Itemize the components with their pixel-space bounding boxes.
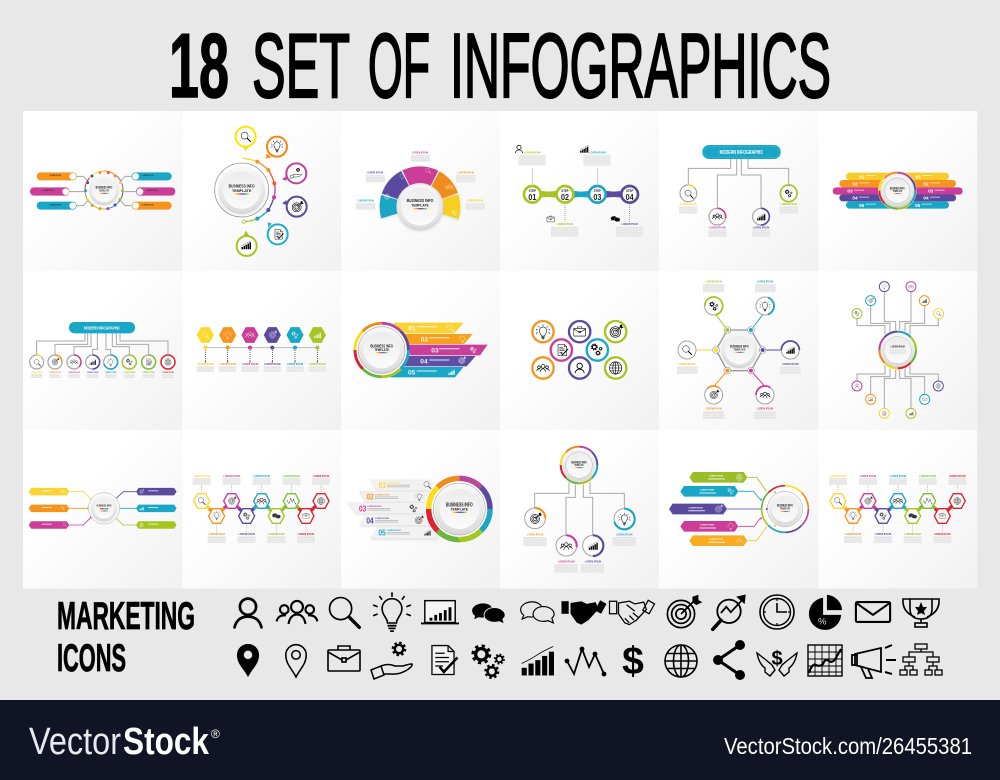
panel 18: hexagon chain repeat bbox=[829, 476, 966, 543]
panel 11: hexagon hub with six nodes: LOREM IPSUM bbox=[679, 364, 695, 366]
panel 6: central disc with five stacked double bars: 05 bbox=[915, 203, 921, 208]
panel 1: central ring with six pill bars: BUSINESS INFO bbox=[96, 186, 112, 190]
panel 17: disc with five hexagonal bars on the left bbox=[669, 472, 809, 546]
panel 7: modern infographic with eight nodes bbox=[30, 322, 175, 378]
panel 4: four step chain: LOREM IPSUM bbox=[621, 224, 638, 226]
panel 7: modern infographic with eight nodes: LOREM IPSUM bbox=[123, 372, 136, 374]
row 3 left panels bbox=[29, 475, 493, 543]
panel 7: modern infographic with eight nodes: LOREM IPSUM bbox=[49, 372, 61, 374]
panel 4: four step chain: 02 bbox=[561, 193, 569, 202]
panel 11: hexagon hub with six nodes bbox=[677, 282, 801, 419]
panel 4: four step chain: STEP bbox=[561, 189, 569, 193]
panel 6: central disc with five stacked double bars: 04 bbox=[923, 196, 929, 201]
panel 15: ring with five numbered grey tabs: 05 bbox=[378, 527, 386, 537]
panel 7: modern infographic with eight nodes: LOREM IPSUM bbox=[68, 372, 80, 374]
panel 15: ring with five numbered grey tabs: LOREM IPSUM bbox=[387, 530, 401, 532]
panel 4: four step chain: 03 bbox=[593, 193, 602, 202]
panel 15: ring with five numbered grey tabs: LOREM IPSUM bbox=[367, 506, 382, 508]
panel 11: hexagon hub with six nodes: LOREM IPSUM bbox=[705, 409, 722, 411]
brand logo: ® bbox=[211, 727, 220, 741]
image reference: VectorStock.com/26455381 bbox=[724, 733, 972, 759]
panel 6: central disc with five stacked double bars bbox=[833, 171, 963, 210]
brand logo: Stock bbox=[123, 721, 210, 763]
panel 15: ring with five numbered grey tabs: 04 bbox=[366, 515, 374, 525]
panel 15: ring with five numbered grey tabs: LOREM IPSUM bbox=[375, 494, 389, 496]
panel 6: central disc with five stacked double bars: 02 bbox=[852, 181, 858, 186]
panel 9: disc with five slanted colored bars bbox=[354, 322, 488, 378]
panel 17: disc with five hexagonal bars on the left: TEMPLATE bbox=[780, 508, 790, 511]
panel 5: modern infographic org diagram: LOREM IPSUM bbox=[680, 204, 697, 206]
panel 13: disc with six hexagonal bars bbox=[29, 488, 177, 529]
panel 15: ring with five numbered grey tabs: LOREM IPSUM bbox=[375, 518, 389, 520]
panel 16: top ring with four branch nodes: LOREM IPSUM bbox=[616, 534, 633, 536]
panel 15: ring with five numbered grey tabs: 02 bbox=[366, 492, 374, 502]
title: SET bbox=[252, 16, 350, 117]
panel 6: central disc with five stacked double bars: 03 bbox=[847, 189, 853, 194]
panel 16: top ring with four branch nodes: LOREM IPSUM bbox=[558, 561, 575, 563]
panel 5: modern infographic org diagram: LOREM IPSUM bbox=[753, 227, 769, 229]
panel 16: top ring with four branch nodes: BUSINESS INFO bbox=[571, 460, 587, 464]
panel 7: modern infographic with eight nodes: MODERN INFOGRAPHIC bbox=[84, 325, 120, 330]
panel 3: half donut: LOREM IPSUM bbox=[467, 201, 483, 203]
panel 6: central disc with five stacked double bars: 03 bbox=[928, 189, 934, 194]
panel 16: top ring with four branch nodes bbox=[523, 445, 636, 573]
panel 4: four step chain: 01 bbox=[528, 193, 537, 202]
panel 14: hexagon chain bbox=[193, 476, 330, 543]
title bbox=[169, 16, 831, 117]
row 1 right panels bbox=[515, 145, 963, 237]
panel 3: half donut: LOREM IPSUM bbox=[367, 173, 383, 175]
panel 12: central ring with twelve circuit nodes bbox=[852, 282, 944, 418]
panel 17: disc with five hexagonal bars on the left: LOREM IPSUM bbox=[709, 476, 723, 478]
panel 15: ring with five numbered grey tabs: BUSINESS INFO bbox=[446, 502, 473, 508]
row 2 right panels bbox=[532, 282, 944, 419]
panel 3: half donut: LOREM IPSUM bbox=[412, 153, 428, 155]
panel 4: four step chain: STEP bbox=[529, 189, 537, 193]
title: 18 bbox=[169, 16, 229, 117]
panel 1: central ring with six pill bars: TEMPLATE bbox=[99, 189, 109, 193]
marketing icons heading: MARKETING bbox=[57, 595, 195, 638]
panel 15: ring with five numbered grey tabs: TEMPLATE bbox=[451, 507, 468, 511]
panel 5: modern infographic org diagram: MODERN INFOGRAPHIC bbox=[720, 150, 763, 156]
footer bar bbox=[0, 700, 1000, 780]
panel 6: central disc with five stacked double bars: TEMPLATE bbox=[893, 190, 902, 193]
panel 1: central ring with six pill bars: LOREM IPSUM bbox=[42, 190, 55, 192]
panel 9: disc with five slanted colored bars: 05 bbox=[408, 370, 416, 377]
panel 6: central disc with five stacked double bars: 01 bbox=[916, 174, 921, 179]
row 1 left panels bbox=[30, 127, 485, 256]
brand logo bbox=[29, 721, 220, 763]
panel 4: four step chain: LOREM IPSUM bbox=[589, 153, 606, 155]
panel 1: central ring with six pill bars bbox=[30, 163, 175, 217]
panel 9: disc with five slanted colored bars: TEMPLATE bbox=[374, 348, 390, 352]
panel 9: disc with five slanted colored bars: 03 bbox=[431, 348, 439, 355]
panel 5: modern infographic org diagram: LOREM IPSUM bbox=[780, 204, 797, 206]
panel 1: central ring with six pill bars: LOREM IPSUM bbox=[49, 175, 62, 177]
panel 8: hexagon timeline: LOREM IPSUM bbox=[287, 364, 303, 366]
panel 11: hexagon hub with six nodes: LOREM IPSUM bbox=[782, 364, 799, 366]
panel 16: top ring with four branch nodes: LOREM IPSUM bbox=[527, 534, 543, 536]
panel 4: four step chain: 04 bbox=[626, 193, 634, 202]
panel 11: hexagon hub with six nodes: LOREM IPSUM bbox=[757, 282, 773, 284]
marketing icons row 2: $ bbox=[771, 648, 783, 670]
panel 13: disc with six hexagonal bars: TEMPLATE bbox=[100, 507, 109, 510]
panel 5: modern infographic org diagram bbox=[679, 145, 798, 237]
panel 17: disc with five hexagonal bars on the left: LOREM IPSUM bbox=[689, 507, 703, 509]
panel 6: central disc with five stacked double bars: 02 bbox=[923, 181, 929, 186]
panel 1: central ring with six pill bars: LOREM IPSUM bbox=[146, 190, 158, 192]
panel 16: top ring with four branch nodes: TEMPLATE bbox=[574, 464, 584, 467]
panel 3: half donut: BUSINESS INFO bbox=[407, 198, 433, 204]
panel 13: disc with six hexagonal bars: BUSINESS INFO bbox=[97, 504, 112, 508]
panel 8: hexagon timeline: LOREM IPSUM bbox=[309, 364, 326, 366]
panel 5: modern infographic org diagram: LOREM IPSUM bbox=[709, 227, 726, 229]
panel 11: hexagon hub with six nodes: LOREM IPSUM bbox=[757, 409, 773, 411]
row 2 left panels bbox=[30, 322, 488, 378]
marketing icons row 2 bbox=[237, 640, 942, 683]
panel 10: cluster of eight linked icon circles bbox=[532, 321, 626, 379]
panel 6: central disc with five stacked double bars: 05 bbox=[859, 203, 865, 208]
panel 4: four step chain bbox=[515, 145, 643, 237]
panel 15: ring with five numbered grey tabs: 03 bbox=[359, 503, 367, 513]
panel 2: big disc with pods on arc bbox=[215, 127, 307, 256]
panel 7: modern infographic with eight nodes: LOREM IPSUM bbox=[31, 372, 43, 374]
panel 3: half donut: LOREM IPSUM bbox=[357, 201, 374, 203]
panel 3: half donut: TEMPLATE bbox=[411, 203, 429, 207]
panel 6: central disc with five stacked double bars: 01 bbox=[859, 174, 865, 179]
panel 8: hexagon timeline: LOREM IPSUM bbox=[219, 364, 236, 366]
panel 9: disc with five slanted colored bars: 04 bbox=[420, 359, 428, 366]
row 3 right panels bbox=[523, 445, 966, 573]
panel 12: central ring with twelve circuit nodes: LOREM IPSUM bbox=[891, 344, 905, 348]
panel 7: modern infographic with eight nodes: LOREM IPSUM bbox=[87, 372, 99, 374]
panel 8: hexagon timeline: LOREM IPSUM bbox=[242, 364, 258, 366]
panel 8: hexagon timeline: LOREM IPSUM bbox=[197, 364, 214, 366]
panel 11: hexagon hub with six nodes: BUSINESS INFO bbox=[730, 345, 749, 349]
panel 7: modern infographic with eight nodes: LOREM IPSUM bbox=[143, 372, 155, 374]
panel 11: hexagon hub with six nodes: LOREM IPSUM bbox=[705, 282, 722, 284]
panel 17: disc with five hexagonal bars on the left: LOREM IPSUM bbox=[709, 539, 723, 541]
panel 4: four step chain: LOREM IPSUM bbox=[557, 224, 573, 226]
panel 1: central ring with six pill bars: LOREM IPSUM bbox=[142, 204, 154, 206]
panel 6: central disc with five stacked double bars: BUSINESS INFO bbox=[890, 186, 905, 190]
marketing icons row 2: $ bbox=[622, 640, 644, 683]
panel 16: top ring with four branch nodes: LOREM IPSUM bbox=[585, 561, 601, 563]
panel 7: modern infographic with eight nodes: LOREM IPSUM bbox=[105, 372, 117, 374]
panel 4: four step chain: STEP bbox=[594, 189, 602, 193]
panel 9: disc with five slanted colored bars: 01 bbox=[408, 326, 416, 333]
marketing icons heading: ICONS bbox=[57, 637, 126, 680]
panel 17: disc with five hexagonal bars on the left: BUSINESS INFO bbox=[777, 504, 793, 508]
panel 1: central ring with six pill bars: LOREM IPSUM bbox=[49, 204, 62, 206]
panel 8: hexagon timeline: LOREM IPSUM bbox=[264, 364, 281, 366]
panel 1: central ring with six pill bars: LOREM IPSUM bbox=[142, 175, 154, 177]
panel 3: half donut: LOREM IPSUM bbox=[457, 173, 474, 175]
panel 9: disc with five slanted colored bars: 02 bbox=[421, 337, 428, 344]
panel 8: hexagon timeline bbox=[197, 327, 326, 372]
panel 7: modern infographic with eight nodes: LOREM IPSUM bbox=[162, 372, 174, 374]
panel 15: ring with five numbered grey tabs: LOREM IPSUM bbox=[387, 482, 401, 484]
panel 9: disc with five slanted colored bars: BUSINESS INFO bbox=[370, 343, 393, 348]
panel 4: four step chain: LOREM IPSUM bbox=[524, 153, 541, 155]
panel 3: half donut bbox=[356, 153, 485, 239]
panel backgrounds grid bbox=[23, 111, 977, 588]
panel 11: hexagon hub with six nodes: TEMPLATE bbox=[733, 348, 746, 352]
panel 17: disc with five hexagonal bars on the left: LOREM IPSUM bbox=[700, 525, 714, 527]
marketing icons row 1 bbox=[234, 592, 939, 631]
panel 17: disc with five hexagonal bars on the left: LOREM IPSUM bbox=[700, 490, 714, 492]
panel 2: big disc with pods on arc: TEMPLATE bbox=[232, 189, 252, 193]
panel 15: ring with five numbered grey tabs bbox=[348, 475, 493, 543]
title: OF bbox=[368, 16, 430, 117]
brand logo: Vector bbox=[29, 721, 121, 763]
panel 6: central disc with five stacked double bars: 04 bbox=[852, 196, 858, 201]
panel 15: ring with five numbered grey tabs: 01 bbox=[379, 480, 386, 490]
marketing icons heading bbox=[57, 595, 195, 680]
panel 2: big disc with pods on arc: BUSINESS INFO bbox=[229, 184, 255, 190]
panel 4: four step chain: STEP bbox=[626, 189, 634, 193]
